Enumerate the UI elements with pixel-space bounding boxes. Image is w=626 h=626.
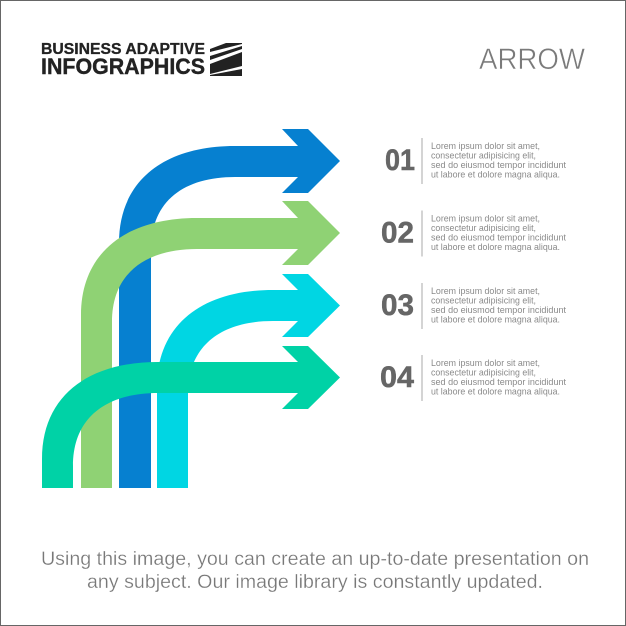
title: ARROW: ARROW xyxy=(479,43,586,76)
item 02 xyxy=(381,210,566,256)
footer text: any subject. Our image library is constantly updated. xyxy=(87,572,543,593)
number 04: 04 xyxy=(380,361,414,394)
item 04 xyxy=(380,355,566,401)
description 01: ut labore et dolore magna aliqua. xyxy=(431,170,560,180)
description 02: ut labore et dolore magna aliqua. xyxy=(431,242,560,253)
arrow 3: cyan xyxy=(157,274,340,488)
number 01: 01 xyxy=(385,144,415,177)
description 03: sed do eiusmod tempor incididunt xyxy=(431,305,566,316)
description 03: Lorem ipsum dolor sit amet, xyxy=(431,286,540,297)
logo text: business adaptive: BUSINESS ADAPTIVE xyxy=(41,41,205,58)
description 02: sed do eiusmod tempor incididunt xyxy=(431,232,566,244)
footer text: Using this image, you can create an up-to-date presentation on xyxy=(41,549,589,570)
arrow 2: green xyxy=(81,201,340,488)
logo icon: stripes xyxy=(210,43,242,76)
logo text: infographics: INFOGRAPHICS xyxy=(41,54,205,79)
description 02: Lorem ipsum dolor sit amet, xyxy=(431,214,540,224)
item 01 xyxy=(385,138,566,184)
description 04: consectetur adipisicing elit, xyxy=(431,368,536,378)
description 03: consectetur adipisicing elit, xyxy=(431,296,536,306)
description 04: Lorem ipsum dolor sit amet, xyxy=(431,358,540,369)
description 01: consectetur adipisicing elit, xyxy=(431,150,536,162)
item 03 xyxy=(381,283,566,329)
description 03: ut labore et dolore magna aliqua. xyxy=(431,314,560,326)
description 04 xyxy=(431,358,566,398)
arrow chart xyxy=(42,129,340,488)
description 03 xyxy=(431,286,566,326)
description 01 xyxy=(431,141,566,180)
footer text xyxy=(41,549,589,593)
description 01: sed do eiusmod tempor incididunt xyxy=(431,160,566,171)
number 02: 02 xyxy=(381,216,414,250)
description 02 xyxy=(431,214,566,253)
description 04: sed do eiusmod tempor incididunt xyxy=(431,377,566,388)
arrow 1: blue xyxy=(119,129,340,488)
description 01: Lorem ipsum dolor sit amet, xyxy=(431,141,540,152)
arrow 4: teal xyxy=(42,346,340,488)
logo xyxy=(41,41,242,79)
description 02: consectetur adipisicing elit, xyxy=(431,223,536,234)
description 04: ut labore et dolore magna aliqua. xyxy=(431,386,560,398)
number 03: 03 xyxy=(381,289,414,322)
